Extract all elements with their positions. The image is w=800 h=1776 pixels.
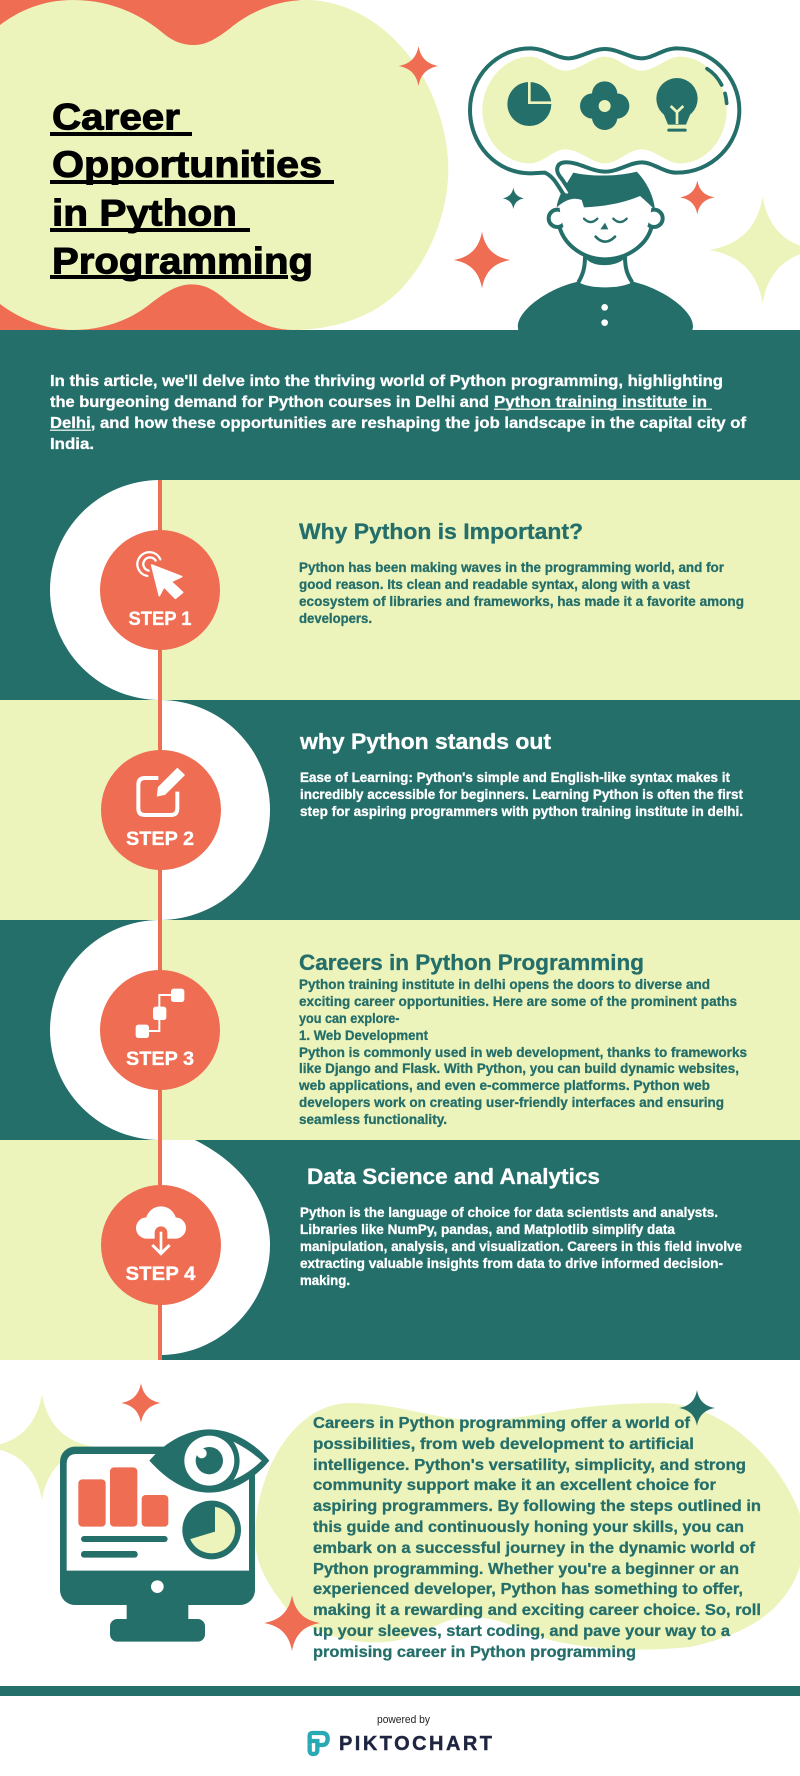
conclusion text: embark on a successful journey in the dynamic world of <box>313 1540 756 1557</box>
title: Career <box>52 96 180 138</box>
step 1 body <box>299 560 744 626</box>
step 3 badge <box>100 970 220 1090</box>
bar chart <box>78 1467 168 1527</box>
icon: pie chart <box>507 80 553 126</box>
step 4 body: making. <box>300 1273 350 1288</box>
step 4 body: Libraries like NumPy, pandas, and Matplotlib simplify data <box>300 1222 675 1237</box>
title: in Python <box>52 192 237 234</box>
conclusion text: Careers in Python programming offer a world of <box>313 1415 691 1432</box>
icon: edit note <box>138 768 184 815</box>
footer divider bar <box>0 1686 800 1696</box>
step 4 heading: Data Science and Analytics <box>307 1164 600 1189</box>
panel: introduction <box>0 330 800 480</box>
step 3 label: STEP 3 <box>126 1049 194 1070</box>
step 4 label: STEP 4 <box>126 1264 196 1285</box>
panel: step 3 <box>0 920 800 1140</box>
footer: powered by: powered by <box>377 1714 430 1726</box>
intro text: In this article, we'll delve into the thriving world of Python programming, highlighting <box>50 373 723 390</box>
illustration: monitor with eye <box>60 1429 269 1642</box>
conclusion text: community support make it an excellent choice for <box>313 1477 716 1494</box>
intro text: Python training institute in <box>494 394 707 411</box>
conclusion text: making it a rewarding and exciting career choice. So, roll <box>313 1602 761 1619</box>
intro text: the burgeoning demand for Python courses in Delhi and <box>50 394 489 411</box>
step 1 badge <box>100 530 220 650</box>
step 2 body: incredibly accessible for beginners. Learning Python is often the first <box>300 787 743 802</box>
step 4 body: Python is the language of choice for data scientists and analysts. <box>300 1205 718 1220</box>
conclusion text: intelligence. Python's versatility, simplicity, and strong <box>313 1457 746 1474</box>
title: Opportunities <box>52 144 322 185</box>
bubble highlight dashes <box>707 69 727 103</box>
step 3 body: Python is commonly used in web development, thanks to frameworks <box>299 1045 747 1060</box>
step 3 body <box>298 977 747 1127</box>
step 2 badge <box>101 750 221 870</box>
step 3 body: seamless functionality. <box>299 1112 447 1127</box>
icon: connected nodes <box>136 989 184 1038</box>
intro text: India. <box>50 436 94 453</box>
title <box>50 96 334 282</box>
panel: step 1 <box>0 480 800 700</box>
icon: cursor click <box>137 552 183 598</box>
step 3 body: you can explore- <box>299 1011 400 1026</box>
conclusion text <box>313 1415 761 1661</box>
step 4 body: extracting valuable insights from data to drive informed decision- <box>300 1256 723 1271</box>
person body <box>518 282 693 330</box>
step 2 heading: why Python stands out <box>299 729 552 754</box>
icon: flower <box>580 81 629 130</box>
step 1 heading: Why Python is Important? <box>299 519 583 544</box>
icon: piktochart logo <box>310 1733 328 1754</box>
bubble cream fill <box>482 57 727 163</box>
pie chart <box>182 1501 241 1559</box>
conclusion text: promising career in Python programming <box>313 1644 636 1661</box>
conclusion text: Python programming. Whether you're a beginner or an <box>313 1561 739 1578</box>
speech bubble <box>470 48 739 196</box>
intro text: Delhi, and how these opportunities are reshaping the job landscape in the capital city of <box>50 415 747 432</box>
title: Programming <box>52 240 313 282</box>
text lines <box>81 1536 168 1558</box>
conclusion blob <box>255 1403 800 1650</box>
step 2 body: step for aspiring programmers with python training institute in delhi. <box>300 804 743 819</box>
sparkles: conclusion <box>0 1383 320 1651</box>
step 3 heading: Careers in Python Programming <box>299 950 644 975</box>
conclusion text: aspiring programmers. By following the steps outlined in <box>313 1498 761 1515</box>
person neck and head <box>549 172 663 282</box>
step 4 badge <box>101 1185 221 1305</box>
step 3 body: web applications, and even e-commerce platforms. Python web <box>298 1078 710 1093</box>
step 3 body: 1. Web Development <box>299 1028 428 1043</box>
icon: teal sparkle over conclusion <box>679 1390 715 1426</box>
step 1 label: STEP 1 <box>128 609 192 630</box>
step 4 body: manipulation, analysis, and visualization. Careers in this field involve <box>300 1239 742 1254</box>
hero background blob <box>0 0 448 330</box>
person face <box>584 219 627 242</box>
icon: cloud download <box>136 1206 186 1259</box>
step 1 body: Python has been making waves in the programming world, and for <box>299 560 725 575</box>
conclusion text: experienced developer, Python has something to offer, <box>313 1581 743 1598</box>
step 3 body: exciting career opportunities. Here are some of the prominent paths <box>299 994 737 1009</box>
conclusion text: up your sleeves, start coding, and pave your way to a <box>313 1623 730 1640</box>
intro text <box>50 373 747 453</box>
step 1 body: ecosystem of libraries and frameworks, has made it a favorite among <box>299 594 744 609</box>
panel: step 4 <box>0 1140 800 1360</box>
illustration: thinking person with speech bubble <box>454 48 800 330</box>
sparkles around the person <box>454 180 800 303</box>
icon: orange sparkle on blob <box>398 46 438 86</box>
step 4 body <box>300 1205 742 1288</box>
conclusion text: possibilities, from web development to artificial <box>313 1436 694 1453</box>
panel: step 2 <box>0 700 800 920</box>
footer: piktochart wordmark: PIKTOCHART <box>339 1733 492 1755</box>
step 1 body: developers. <box>299 611 372 626</box>
icon: eye <box>149 1429 269 1493</box>
conclusion text: this guide and continuously honing your skills, you can <box>313 1519 744 1536</box>
step 1 body: good reason. Its clean and readable syntax, along with a vast <box>299 577 690 592</box>
step 3 body: like Django and Flask. With Python, you can build dynamic websites, <box>299 1061 739 1076</box>
step 3 body: developers work on creating user-friendly interfaces and ensuring <box>299 1095 724 1110</box>
timeline line <box>158 480 162 1360</box>
step 2 body: Ease of Learning: Python's simple and English-like syntax makes it <box>300 770 730 785</box>
step 2 label: STEP 2 <box>126 829 194 850</box>
icon: light bulb <box>656 78 698 132</box>
step 2 body <box>300 770 743 819</box>
step 3 body: Python training institute in delhi opens the doors to diverse and <box>299 977 710 992</box>
